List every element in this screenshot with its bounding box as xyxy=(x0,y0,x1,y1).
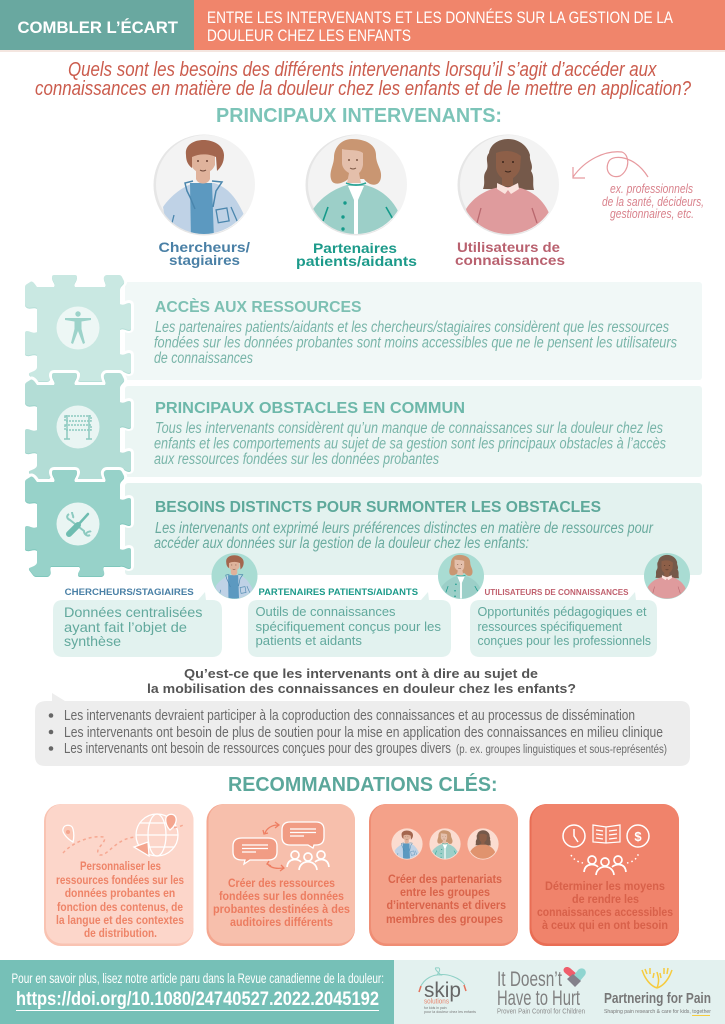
need bubble: chercheurs/stagiaires: Données centralisées xyxy=(64,604,202,620)
panel: accès aux ressources: ACCÈS AUX RESSOURCES xyxy=(155,297,362,316)
need bubble: utilisateurs de connaissances: conçues pour les professionnels xyxy=(478,634,651,648)
recommendation card 4: à ceux qui en ont besoin xyxy=(542,920,668,932)
recommendation card 3: d’intervenants et divers xyxy=(386,900,506,912)
footer: logos xyxy=(394,960,725,1024)
puzzle piece 1: accessibility icon xyxy=(25,275,131,382)
recommendation card 4: $ xyxy=(634,829,642,844)
footer: article link: Pour en savoir plus, lisez notre article paru dans la Revue canadienne de la douleur: xyxy=(12,970,384,986)
logo: SKIP xyxy=(419,968,476,1014)
stakeholder: utilisateurs de connaissances: connaissances xyxy=(455,252,565,268)
recommendation card 3 xyxy=(369,804,518,946)
logo: SKIP: solutions xyxy=(424,998,449,1006)
recommendation card 2: Créer des ressources xyxy=(228,878,335,890)
footer: article link: https://doi.org/10.1080/24740527.2022.2045192 xyxy=(16,989,379,1010)
recommendation card 3: membres des groupes xyxy=(386,914,503,926)
stakeholder: partenaires patients/aidants: patients/aidants xyxy=(296,253,417,269)
recommendation card 2: probantes destinées à des xyxy=(213,904,350,916)
footer: article link xyxy=(0,960,394,1024)
logo: Partnering for Pain: Shaping pain research & care for kids, together xyxy=(604,1009,711,1015)
stakeholder: partenaires patients/aidants: Partenaires xyxy=(313,240,397,256)
need bubble: chercheurs/stagiaires: synthèse xyxy=(64,633,121,649)
logo: It Doesn't Have to Hurt: It Doesn’t xyxy=(497,968,562,991)
sub-question xyxy=(147,666,576,696)
recommendation card 4: Déterminer les moyens xyxy=(545,881,665,893)
recommendation card 1: fonction des contenus, de xyxy=(57,902,183,914)
recommendation card 2: fondées sur les données xyxy=(219,891,344,903)
logo: Partnering for Pain xyxy=(604,968,711,1016)
recommendation card 4: connaissances accessibles xyxy=(537,907,673,919)
need bubble: partenaires patients/aidants: PARTENAIRES PATIENTS/AIDANTS xyxy=(258,587,418,598)
icon: globe with pins and path xyxy=(63,814,185,856)
need bubble: chercheurs/stagiaires: CHERCHEURS/STAGIAIRES xyxy=(65,587,194,598)
stakeholder: utilisateurs de connaissances xyxy=(455,134,565,268)
sub-question: Qu’est-ce que les intervenants ont à dire au sujet de xyxy=(184,666,538,681)
panel: besoins distincts xyxy=(125,483,702,575)
grey speech bubble: what stakeholders say: (p. ex. groupes linguistiques et sous-représentés) xyxy=(456,744,667,756)
need bubble: utilisateurs de connaissances: ressources spécifiquement xyxy=(478,620,623,634)
recommendation card 4: de rendre les xyxy=(572,894,639,906)
recommendation card 3: entre les groupes xyxy=(400,887,490,899)
note: examples of knowledge users: ex. professionnels xyxy=(610,181,693,196)
recommendation card 1: données probantes en xyxy=(65,888,175,900)
panel: principaux obstacles en commun xyxy=(125,386,702,477)
recommendation card 1: Personnaliser les xyxy=(80,861,161,873)
panel: accès aux ressources xyxy=(125,282,702,380)
header left: teal tag: COMBLER L’ÉCART xyxy=(18,18,179,37)
puzzle piece 3: tools icon xyxy=(25,470,131,577)
logo: SKIP: pour la douleur chez les enfants xyxy=(424,1010,476,1014)
need bubble: utilisateurs de connaissances xyxy=(470,553,690,657)
panel: besoins distincts: accéder aux données sur la gestion de la douleur chez les enfants: xyxy=(154,535,529,552)
need bubble: partenaires patients/aidants: patients et aidants xyxy=(256,633,362,648)
panel: principaux obstacles en commun: aux ressources fondées sur les données probantes xyxy=(154,451,439,468)
icon: clock, book, dollar and people xyxy=(563,825,649,863)
need bubble: utilisateurs de connaissances: Opportunités pédagogiques et xyxy=(478,605,647,619)
note: examples of knowledge users xyxy=(602,181,704,221)
grey speech bubble: what stakeholders say: Les intervenants ont besoin de ressources conçues pour des groupes divers xyxy=(64,741,451,757)
need bubble: chercheurs/stagiaires xyxy=(53,553,258,657)
panel: besoins distincts: BESOINS DISTINCTS POUR SURMONTER LES OBSTACLES xyxy=(155,499,601,516)
stakeholder: chercheurs/stagiaires: Chercheurs/ xyxy=(158,239,250,255)
logo: It Doesn't Have to Hurt xyxy=(497,967,586,1016)
puzzle piece 2: barrier icon xyxy=(25,373,131,480)
need bubble: partenaires patients/aidants xyxy=(248,553,484,657)
main question xyxy=(35,59,692,100)
recommendation card 1: la langue et des contextes xyxy=(56,915,184,927)
logo: SKIP: skip xyxy=(424,979,461,1002)
header left: teal tag xyxy=(0,0,194,50)
need bubble: partenaires patients/aidants: spécifiquement conçus pour les xyxy=(256,619,442,634)
header bar xyxy=(0,0,725,52)
logo: It Doesn't Have to Hurt: Have to Hurt xyxy=(497,987,580,1010)
recommendation card 4 xyxy=(530,804,679,946)
icon: three stakeholder portraits xyxy=(391,828,499,862)
panel: accès aux ressources: de connaissances xyxy=(154,350,253,367)
need bubble: chercheurs/stagiaires: ayant fait l’objet de xyxy=(64,619,187,635)
sub-question: la mobilisation des connaissances en douleur chez les enfants? xyxy=(147,681,576,696)
stakeholder: chercheurs/stagiaires: stagiaires xyxy=(169,252,240,268)
arrow: loop pointing to knowledge users xyxy=(573,152,648,178)
recommendation card 1: de distribution. xyxy=(84,928,157,940)
header right: subtitle xyxy=(194,0,725,50)
icon: barrier xyxy=(56,406,100,448)
icon: screwdriver and wrench xyxy=(56,502,100,546)
panel: principaux obstacles en commun: PRINCIPAUX OBSTACLES EN COMMUN xyxy=(155,400,465,417)
need bubble: partenaires patients/aidants: Outils de connaissances xyxy=(256,604,396,619)
stakeholder: partenaires patients/aidants xyxy=(296,134,417,269)
note: examples of knowledge users: gestionnaires, etc. xyxy=(610,206,694,221)
stakeholder: utilisateurs de connaissances: Utilisateurs de xyxy=(457,239,560,255)
recommendation card 3: Créer des partenariats xyxy=(388,874,502,886)
icon: speech bubbles and people xyxy=(233,822,324,864)
header right: subtitle: DOULEUR CHEZ LES ENFANTS xyxy=(207,27,411,45)
recommendation card 2: auditoires différents xyxy=(230,917,333,929)
heading: principaux intervenants: PRINCIPAUX INTERVENANTS: xyxy=(216,105,502,127)
icon: person xyxy=(56,306,100,350)
recommendation card 2 xyxy=(206,804,355,946)
recommendation card 1: ressources fondées sur les xyxy=(56,875,184,887)
stakeholder: chercheurs/stagiaires xyxy=(154,134,255,268)
recommendation card 1 xyxy=(44,804,194,946)
logo: It Doesn't Have to Hurt: Proven Pain Control for Children xyxy=(497,1006,585,1016)
need bubble: utilisateurs de connaissances: UTILISATEURS DE CONNAISSANCES xyxy=(484,587,629,597)
grey speech bubble: what stakeholders say xyxy=(35,693,690,766)
heading: recommandations clés: RECOMMANDATIONS CLÉS: xyxy=(228,773,498,796)
logo: SKIP: for kids in pain xyxy=(424,1006,447,1010)
